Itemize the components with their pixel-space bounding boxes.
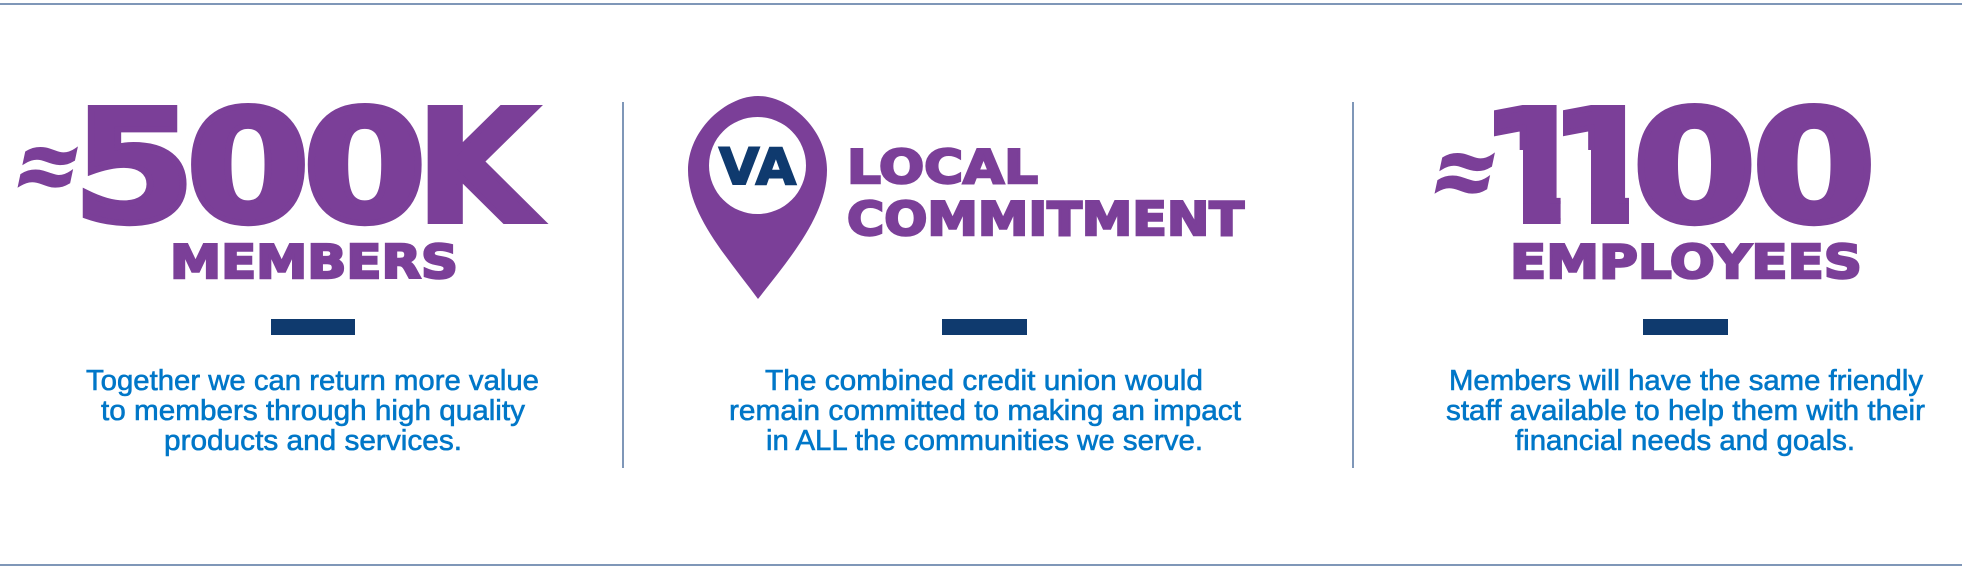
heading: approximately 500K: K [416, 77, 541, 258]
heading: approximately 1100: ≈ [1427, 118, 1503, 226]
icon: map pin with VA: VA [719, 138, 796, 196]
heading: approximately 1100: 0 [1752, 78, 1876, 258]
heading: employees: EMPLOYEES [1510, 235, 1862, 289]
heading: approximately 500K: 5 [73, 78, 195, 258]
heading: approximately 500K [10, 77, 541, 258]
panel: local commitment [688, 96, 1245, 457]
text block: employees description: financial needs and goals. [1515, 425, 1855, 457]
heading: approximately 1100 [1434, 103, 1871, 226]
text block: commitment description: The combined credit union would [765, 365, 1203, 397]
text block: employees description: Members will have the same friendly [1449, 365, 1924, 397]
heading: approximately 1100: 0 [1632, 78, 1757, 258]
text block: commitment description: in ALL the communities we serve. [766, 425, 1203, 457]
heading: approximately 500K: ≈ [10, 112, 86, 220]
text block: members description [86, 365, 539, 457]
heading: approximately 500K: 0 [186, 78, 310, 258]
text block: employees description [1446, 365, 1925, 457]
divider dash [271, 319, 355, 335]
divider dash [942, 319, 1027, 335]
text block: commitment description [729, 365, 1241, 457]
panel: members [10, 77, 541, 457]
text block: commitment description: remain committed to making an impact [729, 395, 1241, 427]
heading: local commitment: LOCAL [847, 140, 1038, 194]
heading: local commitment [847, 140, 1245, 246]
divider dash [1643, 319, 1728, 335]
text block: members description: products and services. [164, 425, 462, 457]
text block: members description: Together we can return more value [86, 365, 539, 397]
text block: members description: to members through high quality [101, 395, 525, 427]
heading: members: MEMBERS [170, 235, 458, 289]
heading: approximately 1100: 1 [1543, 78, 1662, 258]
text block: employees description: staff available to help them with their [1446, 395, 1925, 427]
heading: local commitment: COMMITMENT [847, 192, 1245, 246]
panel: employees [1427, 78, 1925, 457]
icon: map pin with VA [688, 96, 827, 299]
heading: approximately 500K: 0 [303, 78, 427, 258]
heading: approximately 1100: 1 [1475, 78, 1593, 258]
